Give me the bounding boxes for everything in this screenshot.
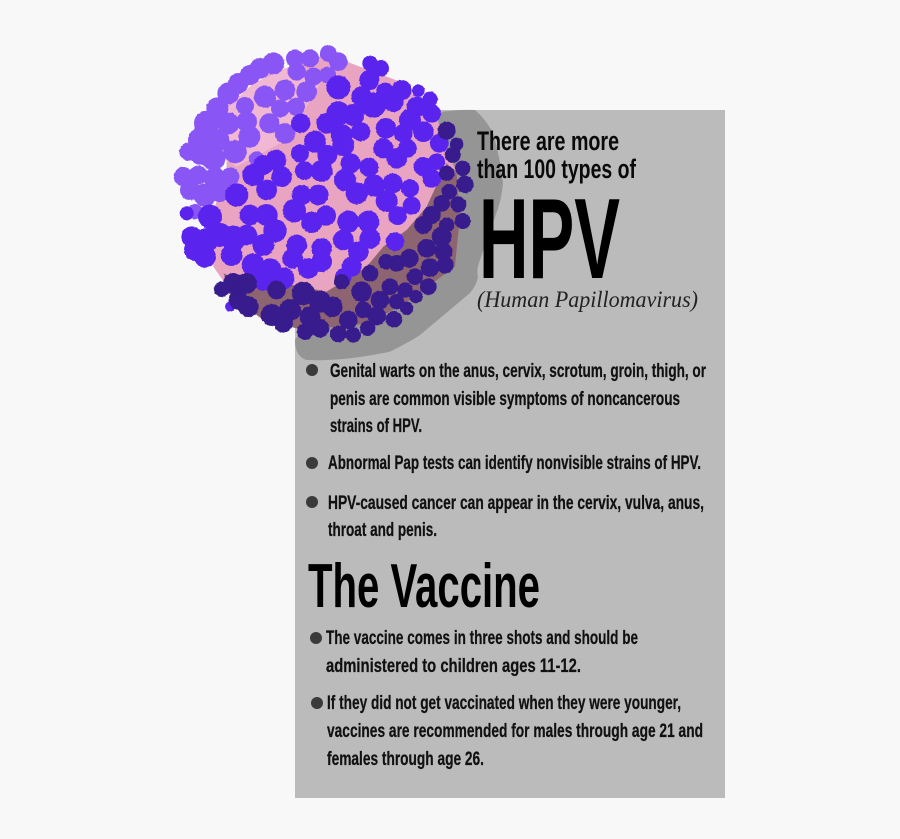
bullet: three shots: The vaccine comes in three shots and should be [326,628,638,649]
bullet: genital warts: penis are common visible symptoms of noncancerous [330,389,680,410]
title: HPV: HPV [479,176,620,303]
bullet: Pap tests [306,453,701,474]
heading: intro [477,126,637,184]
bullet list: vaccine [310,628,703,770]
bullet: cancer: HPV-caused cancer can appear in the cervix, vulva, anus, [328,493,704,514]
virus shadow [295,110,503,360]
bullet: catch-up ages: If they did not get vaccinated when they were younger, [327,693,681,714]
subtitle: Human Papillomavirus: (Human Papillomavirus) [477,287,698,312]
heading: The Vaccine: The Vaccine [308,552,540,621]
bullet: three shots [310,628,638,677]
bullet: cancer [306,493,704,541]
blue capsomeres [181,57,448,311]
bullet: genital warts: Genital warts on the anus, cervix, scrotum, groin, thigh, or [330,361,706,382]
bullet: Pap tests: Abnormal Pap tests can identify nonvisible strains of HPV. [328,453,701,474]
bullet: three shots: administered to children ages 11-12. [326,656,581,677]
bullet: cancer: throat and penis. [328,520,437,541]
bullet: catch-up ages: females through age 26. [327,749,484,770]
bullet: catch-up ages: vaccines are recommended for males through age 21 and [327,721,703,742]
bullet: catch-up ages [311,693,703,770]
heading: intro: There are more [477,126,619,156]
light purple capsomeres [175,46,347,218]
dark purple capsomeres [215,123,473,342]
panel: grey background [295,110,725,798]
icon: HPV virus particle [175,46,473,342]
bullet: genital warts: strains of HPV. [330,416,422,437]
heading: intro: than 100 types of [477,154,637,184]
virus body [210,57,460,330]
bullet list: symptoms [306,361,706,541]
bullet: genital warts [306,361,706,437]
